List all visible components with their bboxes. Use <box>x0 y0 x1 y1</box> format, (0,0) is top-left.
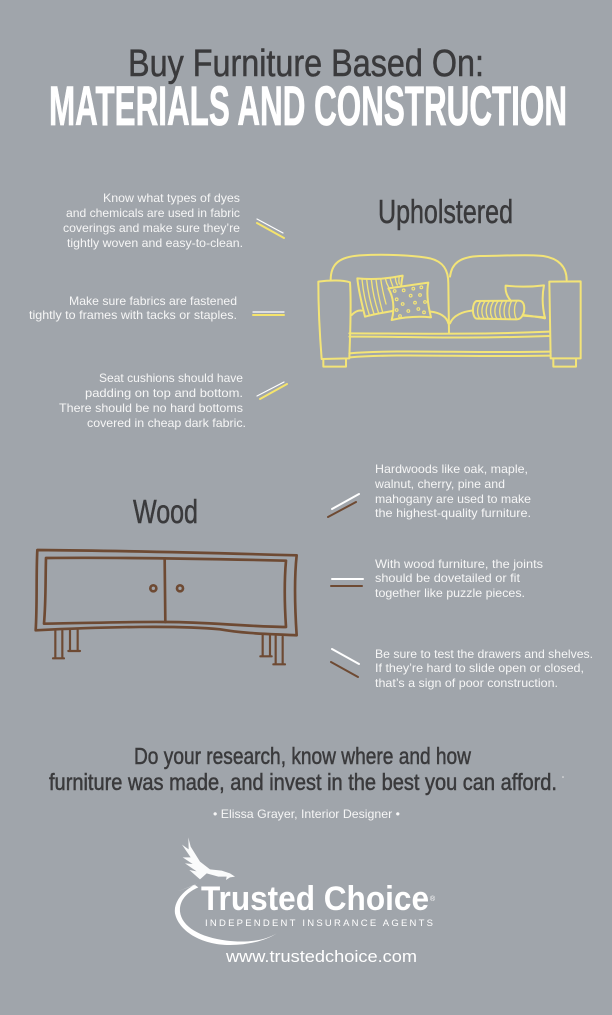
pillow: striped <box>357 276 403 317</box>
text block: hardwoods: Hardwoods like oak, maple, <box>375 462 528 476</box>
text block: drawers: Be sure to test the drawers and shelves. <box>375 647 593 661</box>
text block: drawers: If they’re hard to slide open or closed, <box>375 661 584 675</box>
text block: hardwoods: mahogany are used to make <box>375 492 531 506</box>
text block: drawers <box>375 647 593 690</box>
text block: joints: should be dovetailed or fit <box>375 571 521 585</box>
icon: yellow sofa <box>318 255 581 367</box>
icon: eagle and swoosh <box>175 837 277 945</box>
website url: www.trustedchoice.com <box>225 947 417 966</box>
pillow: back right <box>506 285 545 318</box>
text block: fabric fastening: Make sure fabrics are fastened <box>69 294 237 308</box>
text block: joints <box>375 557 543 600</box>
heading: wood: Wood <box>133 493 198 530</box>
pillow: dotted <box>388 283 431 320</box>
quote <box>49 743 564 795</box>
attribution: • Elissa Grayer, Interior Designer • <box>213 807 400 821</box>
text block: drawers: that’s a sign of poor construction. <box>375 676 558 690</box>
text block: dyes and chemicals: and chemicals are used in fabric <box>66 206 240 220</box>
text block: hardwoods <box>374 462 531 520</box>
text block: seat cushions: covered in cheap dark fabric. <box>87 416 246 430</box>
title: Buy Furniture Based On: <box>128 43 484 85</box>
heading: upholstered: Upholstered <box>378 193 513 230</box>
text block: dyes and chemicals: coverings and make sure they’re <box>63 221 240 235</box>
text block: seat cushions: Seat cushions should have <box>99 371 243 385</box>
icon: brown wood cabinet <box>36 550 297 664</box>
text block: hardwoods: the highest-quality furniture. <box>375 506 531 520</box>
accent lines: upholstered <box>253 219 287 399</box>
logo: Trusted Choice: INDEPENDENT INSURANCE AGENTS <box>205 918 433 929</box>
logo: Trusted Choice: ® <box>430 895 436 903</box>
pillow: bolster <box>473 301 524 319</box>
title <box>49 43 567 137</box>
accent lines: wood <box>328 494 363 677</box>
quote: Do your research, know where and how <box>134 743 471 769</box>
text block: seat cushions <box>59 371 246 430</box>
text block: hardwoods: walnut, cherry, pine and <box>374 477 505 491</box>
text block: joints: together like puzzle pieces. <box>375 586 525 600</box>
logo: Trusted Choice <box>175 837 436 945</box>
text block: fabric fastening: tightly to frames with tacks or staples. <box>29 308 237 322</box>
text block: dyes and chemicals <box>63 191 243 250</box>
text block: dyes and chemicals: Know what types of dyes <box>103 191 240 205</box>
logo: Trusted Choice: Trusted Choice <box>201 880 429 918</box>
text block: dyes and chemicals: tightly woven and easy-to-clean. <box>67 236 243 250</box>
text block: fabric fastening <box>29 294 237 322</box>
text block: seat cushions: There should be no hard bottoms <box>59 401 243 415</box>
text block: joints: With wood furniture, the joints <box>375 557 543 571</box>
text block: seat cushions: padding on top and bottom. <box>85 386 243 400</box>
